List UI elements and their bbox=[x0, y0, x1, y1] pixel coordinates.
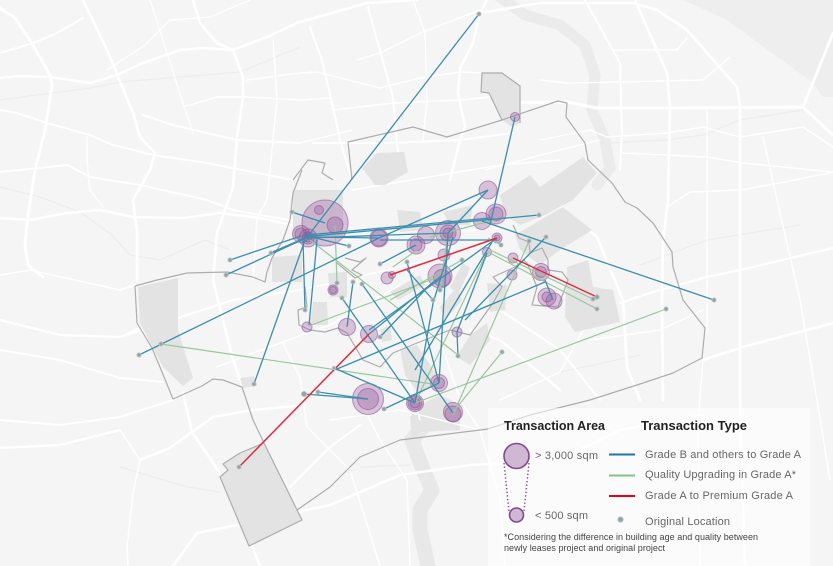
legend heading: transaction area: Transaction Area bbox=[504, 418, 606, 433]
legend item: grade A to premium: Grade A to Premium Grade A bbox=[645, 490, 794, 502]
footnote: newly leases project and original project bbox=[504, 543, 665, 553]
label: under 500 sqm: < 500 sqm bbox=[535, 510, 588, 522]
original location dots bbox=[137, 12, 716, 469]
legend item: grade B and others to grade A: Grade B and others to Grade A bbox=[645, 449, 802, 461]
legend item: original location: Original Location bbox=[645, 516, 730, 528]
district boundary lines bbox=[135, 73, 705, 546]
red lines: grade A to premium grade A bbox=[239, 238, 597, 467]
legend heading: transaction type: Transaction Type bbox=[641, 418, 747, 433]
green lines: quality upgrading in grade A bbox=[161, 217, 666, 415]
water: sea and Huangpu river bbox=[410, 0, 833, 566]
legend: size scale circles bbox=[504, 444, 529, 522]
legend panel bbox=[488, 408, 810, 566]
legend item: quality upgrading: Quality Upgrading in Grade A* bbox=[645, 469, 797, 481]
canals bbox=[0, 47, 803, 492]
blue lines: grade B and others to grade A bbox=[139, 14, 714, 413]
label: over 3000 sqm: > 3,000 sqm bbox=[535, 450, 598, 462]
shaded districts bbox=[138, 73, 620, 546]
footnote: *Considering the difference in building age and quality between bbox=[504, 532, 758, 542]
footnote bbox=[504, 532, 758, 553]
transaction area circles bbox=[292, 112, 562, 422]
